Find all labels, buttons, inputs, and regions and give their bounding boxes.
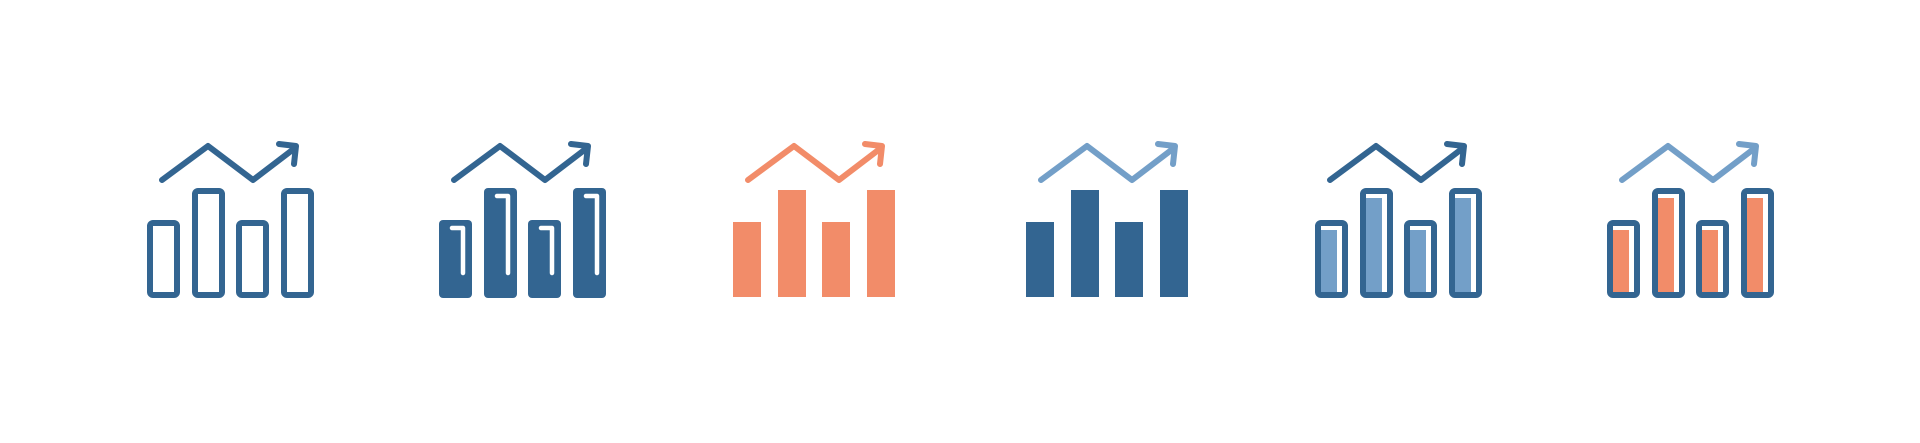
icon 4: blue solid chart light line <box>1026 144 1188 297</box>
icon 6: orange and blue chart <box>1610 144 1771 295</box>
icon 3: orange solid chart <box>733 144 895 297</box>
icon 1: outline chart <box>150 144 311 295</box>
icon 5: two-tone blue chart <box>1318 144 1479 295</box>
icon 2: solid chart with highlights <box>439 144 606 298</box>
